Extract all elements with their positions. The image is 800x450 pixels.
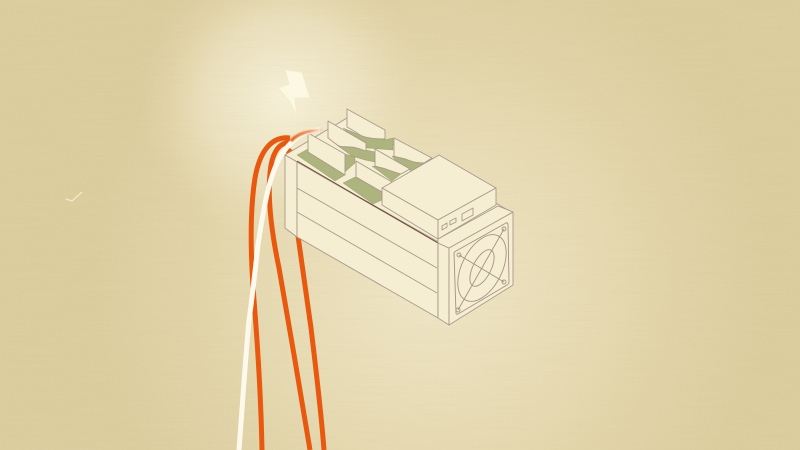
- box left side: [382, 188, 438, 239]
- card dividers: [308, 109, 432, 192]
- front end face: [438, 243, 449, 325]
- circuit boards: [297, 128, 424, 204]
- orange cable left: [251, 138, 290, 450]
- card 3: [347, 109, 385, 139]
- card 1: [308, 133, 345, 175]
- shelf lip: [438, 206, 513, 248]
- cable glow connection: [291, 130, 324, 141]
- orange cable stub: [287, 149, 291, 154]
- long side panel: [297, 162, 438, 318]
- orange cable right: [298, 236, 324, 450]
- orange cable centre: [269, 142, 310, 450]
- box top: [382, 155, 496, 220]
- icon: lightning bolt: [278, 70, 310, 118]
- white cable: [239, 130, 320, 450]
- card 5: [375, 149, 410, 174]
- fan face: [449, 212, 513, 325]
- fan: [448, 223, 516, 314]
- dark edges: [297, 161, 438, 318]
- machine body: [285, 118, 513, 325]
- power supply box: [382, 155, 513, 248]
- small speck stroke: [66, 192, 82, 201]
- card 2: [328, 121, 366, 151]
- box right side: [438, 188, 496, 239]
- card 4: [394, 138, 432, 163]
- side panel seams: [297, 188, 437, 293]
- top surface: [285, 118, 513, 248]
- card 6: [356, 161, 392, 192]
- ports: [442, 208, 473, 230]
- left end panel: [285, 155, 297, 237]
